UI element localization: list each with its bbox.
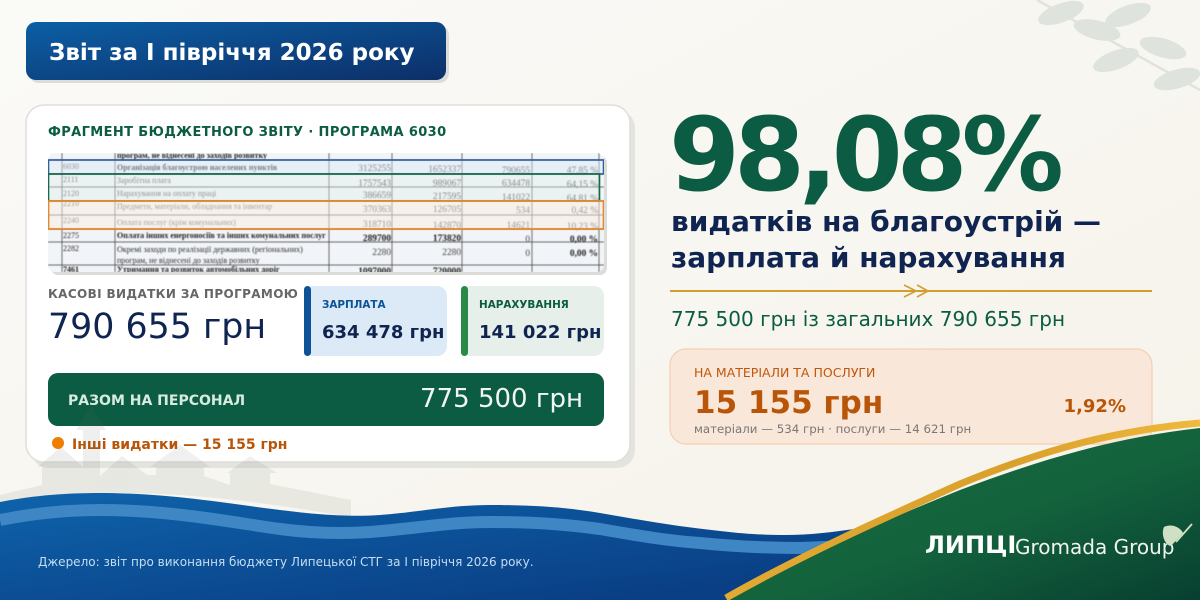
scanned budget table: 64,15 %	[567, 180, 598, 190]
stat: salary: ЗАРПЛАТА	[322, 299, 386, 311]
scanned budget table: 1652337	[428, 165, 461, 175]
scanned budget table: 6030	[63, 162, 79, 171]
scanned budget table: 0,42 %	[571, 206, 598, 216]
scanned budget table: Заробітна плата	[117, 176, 171, 185]
total cash spending: КАСОВІ ВИДАТКИ ЗА ПРОГРАМОЮ	[48, 287, 298, 301]
scanned budget table: 3125255	[358, 164, 391, 174]
highlight: program 6030 row	[48, 160, 604, 174]
card heading: ФРАГМЕНТ БЮДЖЕТНОГО ЗВІТУ · ПРОГРАМА 6030	[48, 125, 447, 140]
scanned budget table: 1097000	[358, 267, 391, 277]
scanned budget table: 370363	[363, 205, 391, 215]
scanned budget table: 0,00 %	[570, 235, 598, 245]
scanned budget table: 534	[516, 206, 530, 216]
stat: payroll accruals: НАРАХУВАННЯ	[479, 299, 569, 311]
panel: budget report card	[26, 105, 635, 468]
logo: Gromada Group	[1015, 535, 1174, 559]
logo	[925, 524, 1192, 559]
scanned budget table: 2280	[372, 248, 391, 258]
scanned budget table: 386659	[363, 191, 391, 201]
scanned budget table: Оплата інших енергоносіїв та інших комунальних послуг	[117, 231, 326, 240]
total personnel bar	[48, 373, 604, 426]
scanned budget table: 989067	[433, 179, 461, 189]
panel: materials and services	[670, 349, 1152, 444]
panel: materials and services: 1,92%	[1064, 396, 1126, 417]
stat: payroll accruals	[461, 286, 604, 356]
scanned budget table: 0,00 %	[570, 249, 598, 259]
scanned budget table: 790655	[502, 166, 530, 176]
source note: Джерело: звіт про виконання бюджету Липецької СТГ за І півріччя 2026 року.	[38, 555, 534, 569]
scanned budget table: 14621	[507, 221, 530, 231]
stat: salary: 634 478 грн	[322, 322, 444, 343]
scanned budget table: 2282	[63, 244, 79, 253]
scanned budget table: 142870	[433, 221, 461, 231]
scanned budget table: Утримання та розвиток автомобільних доріг	[117, 265, 280, 274]
scanned budget table: 2210	[63, 199, 79, 208]
panel: materials and services: матеріали — 534 грн · послуги — 14 621 грн	[694, 422, 971, 436]
scanned budget table: програм, не віднесені до заходів розвитку	[117, 151, 267, 160]
scanned budget table: 1757543	[358, 179, 391, 189]
scanned budget table: 2275	[63, 231, 79, 240]
footer green corner	[726, 423, 1200, 600]
stat: salary	[304, 286, 447, 356]
stat: payroll accruals: 141 022 грн	[479, 322, 601, 343]
headline percentage: 98,08%	[669, 96, 1061, 215]
church silhouette	[0, 382, 351, 517]
scanned budget table: Оплата послуг (крім комунальних)	[117, 218, 236, 227]
scanned budget table: 0	[525, 235, 530, 245]
scanned budget table: 2280	[442, 248, 461, 258]
divider with arrows	[670, 285, 1152, 297]
scanned budget table: 47,85 %	[567, 166, 598, 176]
headline caption: зарплата й нарахування	[671, 241, 1066, 274]
total personnel bar: РАЗОМ НА ПЕРСОНАЛ	[68, 393, 245, 409]
share explanation: 775 500 грн із загальних 790 655 грн	[671, 307, 1065, 331]
other expenses note: Інші видатки — 15 155 грн	[72, 437, 287, 453]
icon: olive branch	[1035, 0, 1200, 95]
logo: ЛИПЦІ	[925, 531, 1016, 559]
scanned budget table: Предмети, матеріали, обладнання та інвентар	[117, 202, 272, 211]
scanned budget table: 720000	[433, 267, 461, 277]
scanned budget table: Окремі заходи по реалізації державних (регіональних)	[117, 245, 303, 254]
panel: materials and services: 15 155 грн	[694, 385, 883, 421]
scanned budget table	[48, 151, 607, 277]
scanned budget table: Нарахування на оплату праці	[117, 189, 217, 198]
scanned budget table: 141022	[502, 193, 530, 203]
highlight: salary rows	[48, 174, 600, 201]
scanned budget table: Організація благоустрою населених пунктів	[117, 163, 278, 172]
scanned budget table: 2120	[63, 189, 79, 198]
title pill	[26, 22, 449, 83]
scanned budget table: 173820	[433, 234, 461, 244]
headline caption: видатків на благоустрій —	[671, 205, 1101, 238]
total cash spending: 790 655 грн	[48, 307, 266, 347]
scanned budget table: програм, не віднесені до заходів розвитку	[117, 256, 260, 265]
headline caption	[671, 205, 1101, 274]
scanned budget table: 0	[525, 249, 530, 259]
panel: materials and services: НА МАТЕРІАЛИ ТА ПОСЛУГИ	[694, 365, 875, 380]
scanned budget table: 217595	[433, 192, 461, 202]
total personnel bar: 775 500 грн	[420, 384, 583, 414]
scanned budget table: 2240	[63, 216, 79, 225]
footer wave	[0, 493, 900, 600]
highlight: materials and services rows	[48, 201, 604, 229]
title pill: Звіт за І півріччя 2026 року	[49, 40, 415, 66]
scanned budget table: 10,23 %	[567, 222, 598, 232]
scanned budget table: 318710	[363, 220, 391, 230]
scanned budget table: 64,81 %	[567, 194, 598, 204]
scanned budget table: 634478	[502, 179, 530, 189]
scanned budget table: 7461	[63, 265, 79, 274]
total cash spending	[48, 287, 298, 347]
scanned budget table: 289700	[363, 234, 391, 244]
scanned budget table: 2111	[63, 175, 78, 184]
scanned budget table: 126705	[433, 205, 461, 215]
